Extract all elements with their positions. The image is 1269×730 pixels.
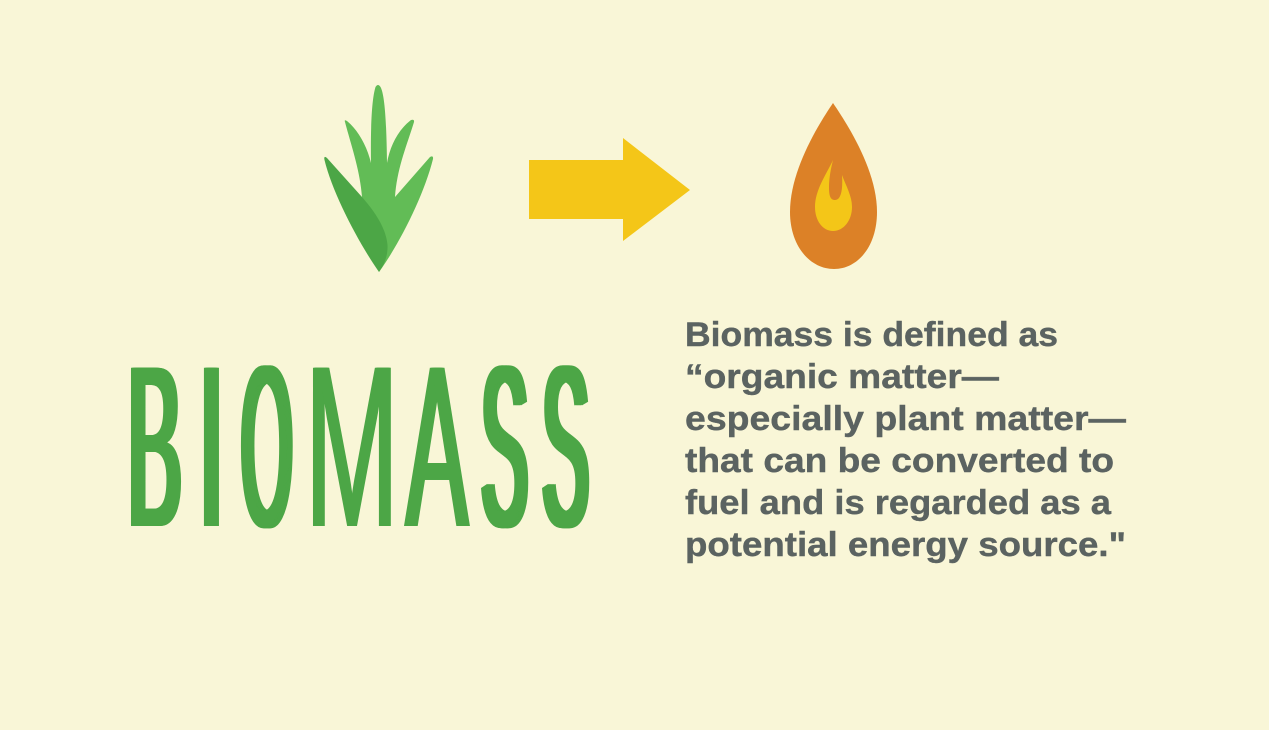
title: BIOMASS: A (404, 318, 465, 575)
definition text block: fuel and is regarded as a (685, 484, 1112, 522)
definition text block: potential energy source." (685, 526, 1126, 564)
orange drop (790, 103, 877, 269)
definition text block: Biomass is defined as (685, 316, 1058, 354)
definition text block (685, 316, 1126, 564)
title: BIOMASS: B (124, 318, 178, 575)
definition text block: “organic matter— (685, 358, 999, 396)
light green leaves (345, 85, 433, 272)
title: BIOMASS: I (196, 318, 219, 575)
title: BIOMASS: O (238, 318, 288, 575)
title: BIOMASS: M (304, 318, 398, 575)
icon: fuel drop with flame (790, 103, 877, 269)
icon: green plant (324, 85, 433, 272)
yellow flame (815, 160, 852, 231)
definition text block: that can be converted to (685, 442, 1114, 480)
arrow: biomass to fuel (529, 138, 690, 241)
title: BIOMASS (124, 318, 590, 575)
title: BIOMASS: S (539, 318, 585, 575)
dark green leaf (324, 157, 388, 272)
title: BIOMASS: S (478, 318, 524, 575)
definition text block: especially plant matter— (685, 400, 1126, 438)
